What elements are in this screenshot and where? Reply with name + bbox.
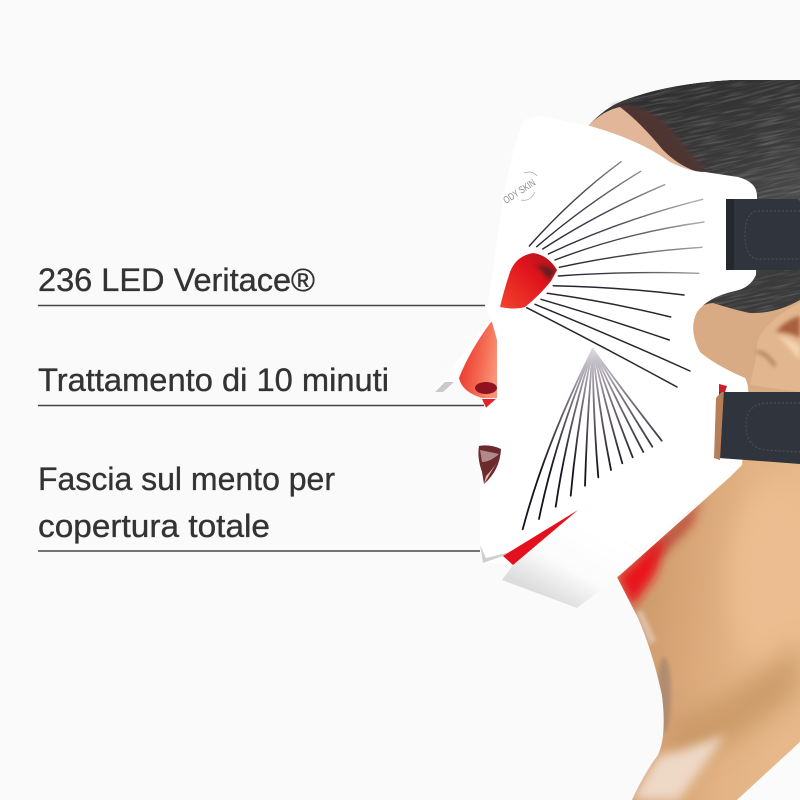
mask body xyxy=(480,116,757,565)
person: head and neck xyxy=(588,80,800,800)
ear xyxy=(750,303,800,392)
lower head strap xyxy=(714,384,800,464)
hair xyxy=(590,80,800,314)
red chin gap xyxy=(503,510,578,565)
eyelid detail xyxy=(535,265,555,280)
red sliver under nose xyxy=(482,399,497,412)
upper line fan xyxy=(529,162,704,276)
nostril xyxy=(475,382,497,394)
upper head strap xyxy=(726,199,800,270)
ear fold xyxy=(757,352,775,366)
chin strap section xyxy=(502,477,730,608)
hairline xyxy=(612,105,708,172)
feature 2: treatment time: Trattamento di 10 minuti xyxy=(38,362,389,398)
nose xyxy=(459,322,500,412)
eye opening xyxy=(500,253,557,308)
ear shadow xyxy=(776,316,800,338)
lower line fan xyxy=(527,286,690,387)
feature 3: chin strap: copertura totale xyxy=(38,508,270,544)
cheek line fan xyxy=(523,349,662,529)
side of face xyxy=(685,300,800,395)
LED mask xyxy=(478,116,757,608)
neck xyxy=(610,440,800,800)
ear highlight xyxy=(778,336,800,360)
feature 3: chin strap: Fascia sul mento per xyxy=(38,461,335,497)
forehead skin xyxy=(588,107,695,175)
feature 1: 236 LED: 236 LED Veritace® xyxy=(38,262,315,298)
feature 3: chin strap xyxy=(38,461,480,551)
chin left shadow xyxy=(480,545,510,563)
mouth opening xyxy=(478,445,501,484)
bridge tip xyxy=(435,382,454,392)
nose bridge piece xyxy=(435,316,491,392)
mask logo: ODY SKIN xyxy=(502,178,538,207)
shirt xyxy=(737,742,800,800)
